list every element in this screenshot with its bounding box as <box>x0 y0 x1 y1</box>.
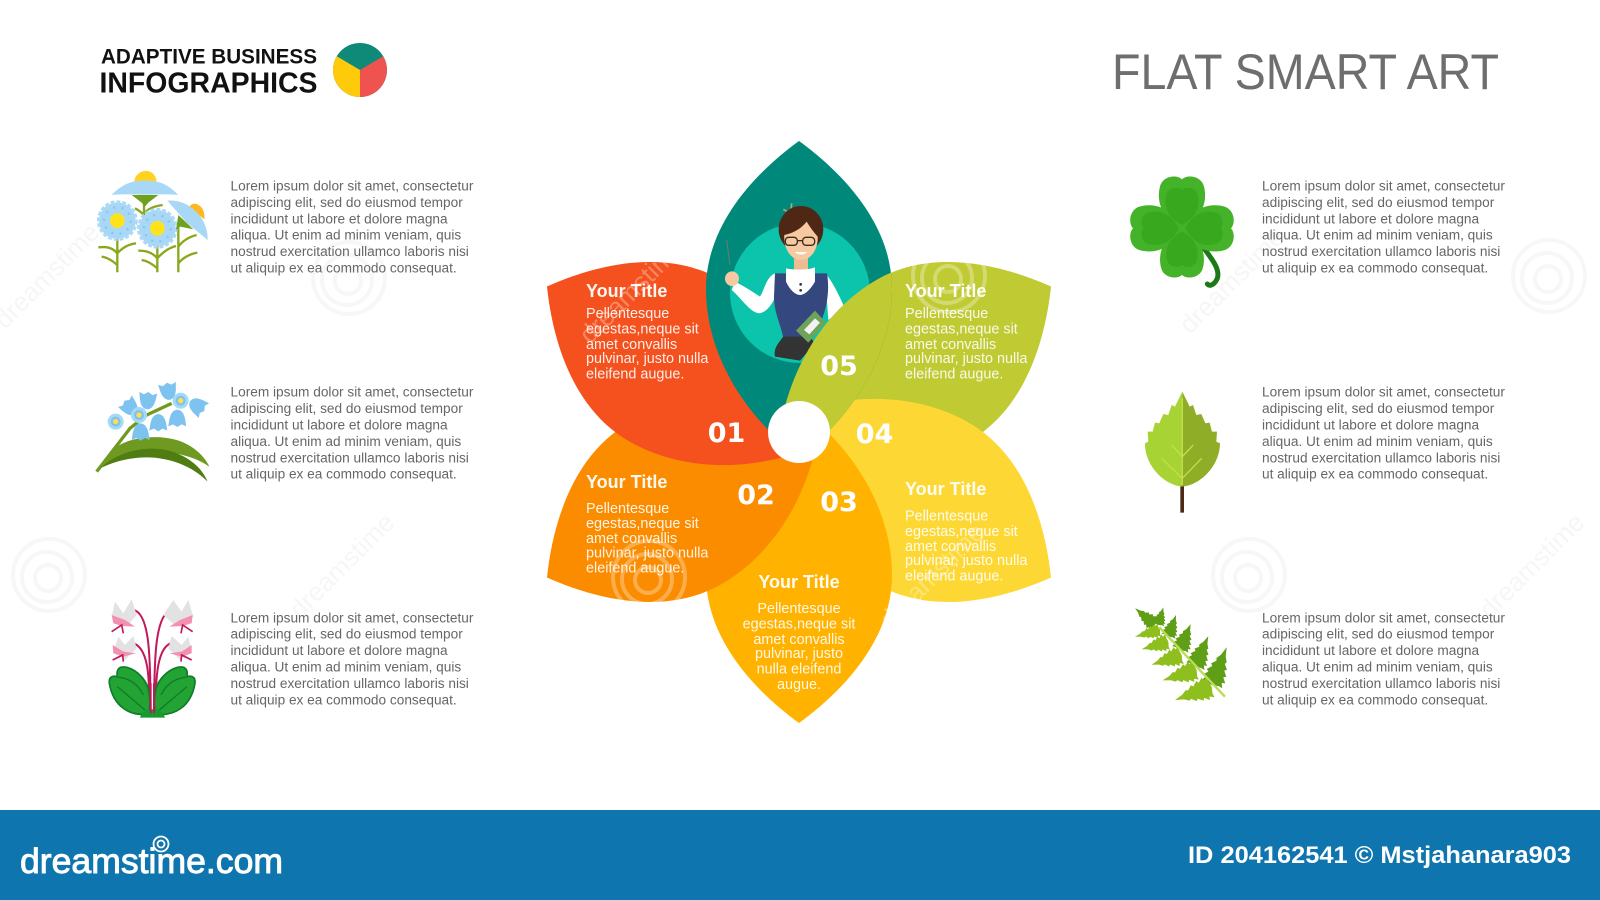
petal 05: amet convallis <box>905 337 996 353</box>
presenter illustration <box>725 203 845 361</box>
icon: bell flowers <box>97 381 210 482</box>
petal 04: 04 <box>856 419 893 450</box>
text block: right 3: incididunt ut labore et dolore magna <box>1262 643 1480 658</box>
petal 01: Your Title <box>586 281 667 301</box>
logo pie icon <box>333 43 387 97</box>
icon: fern <box>1130 602 1238 711</box>
text block: right 3: adipiscing elit, sed do eiusmod tempor <box>1262 627 1495 642</box>
petal 02 <box>500 339 867 658</box>
icon: four-leaf clover <box>1130 177 1234 285</box>
text block: right 1: nostrud exercitation ullamco laboris nisi <box>1262 244 1500 259</box>
text block: right 3: nostrud exercitation ullamco laboris nisi <box>1262 676 1500 691</box>
text block: right 2: nostrud exercitation ullamco laboris nisi <box>1262 450 1500 465</box>
text block: left 1: aliqua. Ut enim ad minim veniam, quis <box>230 228 461 243</box>
petal 04: egestas,neque sit <box>905 524 1018 540</box>
petal 05: Your Title <box>905 281 986 301</box>
petal 05: pulvinar, justo nulla <box>905 351 1027 367</box>
text block: right 3: aliqua. Ut enim ad minim veniam, quis <box>1262 660 1493 674</box>
watermarks: dreamstime <box>283 507 400 624</box>
text block: right 1: adipiscing elit, sed do eiusmod tempor <box>1262 195 1495 210</box>
icon: daisies <box>98 171 208 272</box>
inner teal circle <box>730 223 870 363</box>
text block: left 2: ut aliquip ex ea commodo consequat. <box>230 467 457 482</box>
text block: left 3: ut aliquip ex ea commodo consequat. <box>230 692 457 707</box>
text block: right 2: adipiscing elit, sed do eiusmod tempor <box>1262 401 1495 416</box>
petal 01: pulvinar, justo nulla <box>586 351 708 367</box>
petal 05 <box>786 272 1028 430</box>
petal 04 <box>731 339 1098 658</box>
petal 01: Pellentesque <box>586 306 669 322</box>
centre circle <box>768 401 830 463</box>
petal 02: egestas,neque sit <box>586 516 699 532</box>
petal 04: Pellentesque <box>905 508 988 524</box>
watermarks: dreamstime <box>873 517 990 634</box>
watermarks: dreamstime <box>1473 507 1590 624</box>
text block: left 3: Lorem ipsum dolor sit amet, consectetur <box>230 610 474 625</box>
text block: right 2: incididunt ut labore et dolore magna <box>1262 418 1480 432</box>
footer logo spiral <box>154 836 168 852</box>
watermarks <box>0 217 1590 634</box>
petal 02: pulvinar, justo nulla <box>586 546 708 562</box>
petal 01: egestas,neque sit <box>586 322 699 338</box>
text block: left 2: Lorem ipsum dolor sit amet, consectetur <box>230 385 474 400</box>
text block: left 3: aliqua. Ut enim ad minim veniam, quis <box>230 660 461 674</box>
icon: birch leaf <box>1145 392 1220 513</box>
text block: left 1: ut aliquip ex ea commodo consequat. <box>230 260 457 276</box>
petal 01: amet convallis <box>586 337 677 353</box>
petal 02: eleifend augue. <box>586 560 684 576</box>
text block: right 1: ut aliquip ex ea commodo consequat. <box>1262 260 1488 276</box>
watermarks: dreamstime <box>1173 222 1290 339</box>
petal 03: Pellentesque <box>757 601 841 617</box>
text block: left 2: incididunt ut labore et dolore magna <box>230 418 448 432</box>
petal 01: eleifend augue. <box>586 366 684 382</box>
petal 04: Your Title <box>905 479 986 499</box>
text block: right 2: aliqua. Ut enim ad minim veniam, quis <box>1262 434 1493 449</box>
text block: left 2: nostrud exercitation ullamco laboris nisi <box>230 450 469 465</box>
footer bar <box>0 810 1600 900</box>
petal 02: 02 <box>737 480 775 511</box>
text block: left 1: nostrud exercitation ullamco laboris nisi <box>230 244 469 259</box>
petal 05: eleifend augue. <box>905 366 1003 382</box>
icon: cyclamen <box>109 599 195 718</box>
text block: right 2: Lorem ipsum dolor sit amet, consectetur <box>1262 385 1505 400</box>
petal 03: Your Title <box>758 572 840 592</box>
text block: left 2: aliqua. Ut enim ad minim veniam, quis <box>230 434 461 449</box>
petal 05: Pellentesque <box>905 306 988 322</box>
petal 01: 01 <box>708 418 745 449</box>
petal 05: egestas,neque sit <box>905 322 1018 338</box>
petal 03: 03 <box>820 487 858 518</box>
petal top: teal with presenter <box>706 141 892 457</box>
petal 05 base layer <box>731 206 1098 525</box>
text block: left 1: Lorem ipsum dolor sit amet, consectetur <box>230 178 474 194</box>
main title: FLAT SMART ART <box>1112 44 1499 100</box>
petal 05: 05 <box>820 351 858 382</box>
text block: left 3: adipiscing elit, sed do eiusmod tempor <box>230 627 463 642</box>
petal 02: Your Title <box>586 472 667 492</box>
watermarks: dreamstime <box>573 232 690 349</box>
text block: left 1: adipiscing elit, sed do eiusmod tempor <box>230 195 463 210</box>
flower chart <box>547 141 1051 723</box>
text block: right 2: ut aliquip ex ea commodo consequat. <box>1262 467 1488 482</box>
logo heading: ADAPTIVE BUSINESS <box>101 44 317 68</box>
petal 03: amet convallis <box>753 632 845 648</box>
petal 02: Pellentesque <box>586 501 669 517</box>
text block: left 2: adipiscing elit, sed do eiusmod tempor <box>230 401 463 416</box>
text block: right 1: incididunt ut labore et dolore magna <box>1262 211 1480 226</box>
logo title: INFOGRAPHICS <box>100 68 318 100</box>
petal 02: amet convallis <box>586 531 677 547</box>
petal 03 <box>706 407 892 723</box>
text block: left 1: incididunt ut labore et dolore magna <box>230 211 448 226</box>
petal 04: amet convallis <box>905 539 996 555</box>
footer id: ID 204162541 © Mstjahanara903 <box>1188 842 1571 869</box>
petal 03: nulla eleifend <box>757 662 841 678</box>
text block: left 3: nostrud exercitation ullamco laboris nisi <box>230 676 469 691</box>
logo block <box>100 43 387 100</box>
petal 01 <box>500 206 867 525</box>
text block: right 1: Lorem ipsum dolor sit amet, consectetur <box>1262 178 1505 194</box>
petal 04: pulvinar, justo nulla <box>905 553 1027 569</box>
text block: left 3: incididunt ut labore et dolore magna <box>230 643 448 658</box>
petal 04: eleifend augue. <box>905 568 1003 584</box>
text block: right 3: ut aliquip ex ea commodo consequat. <box>1262 692 1488 707</box>
footer logo: dreamstime.com <box>20 842 283 881</box>
petal 03: augue. <box>777 677 821 693</box>
petal 03: pulvinar, justo <box>755 646 843 662</box>
petal 03: egestas,neque sit <box>743 616 855 632</box>
text block: right 1: aliqua. Ut enim ad minim veniam, quis <box>1262 228 1493 243</box>
text block: right 3: Lorem ipsum dolor sit amet, consectetur <box>1262 610 1505 625</box>
